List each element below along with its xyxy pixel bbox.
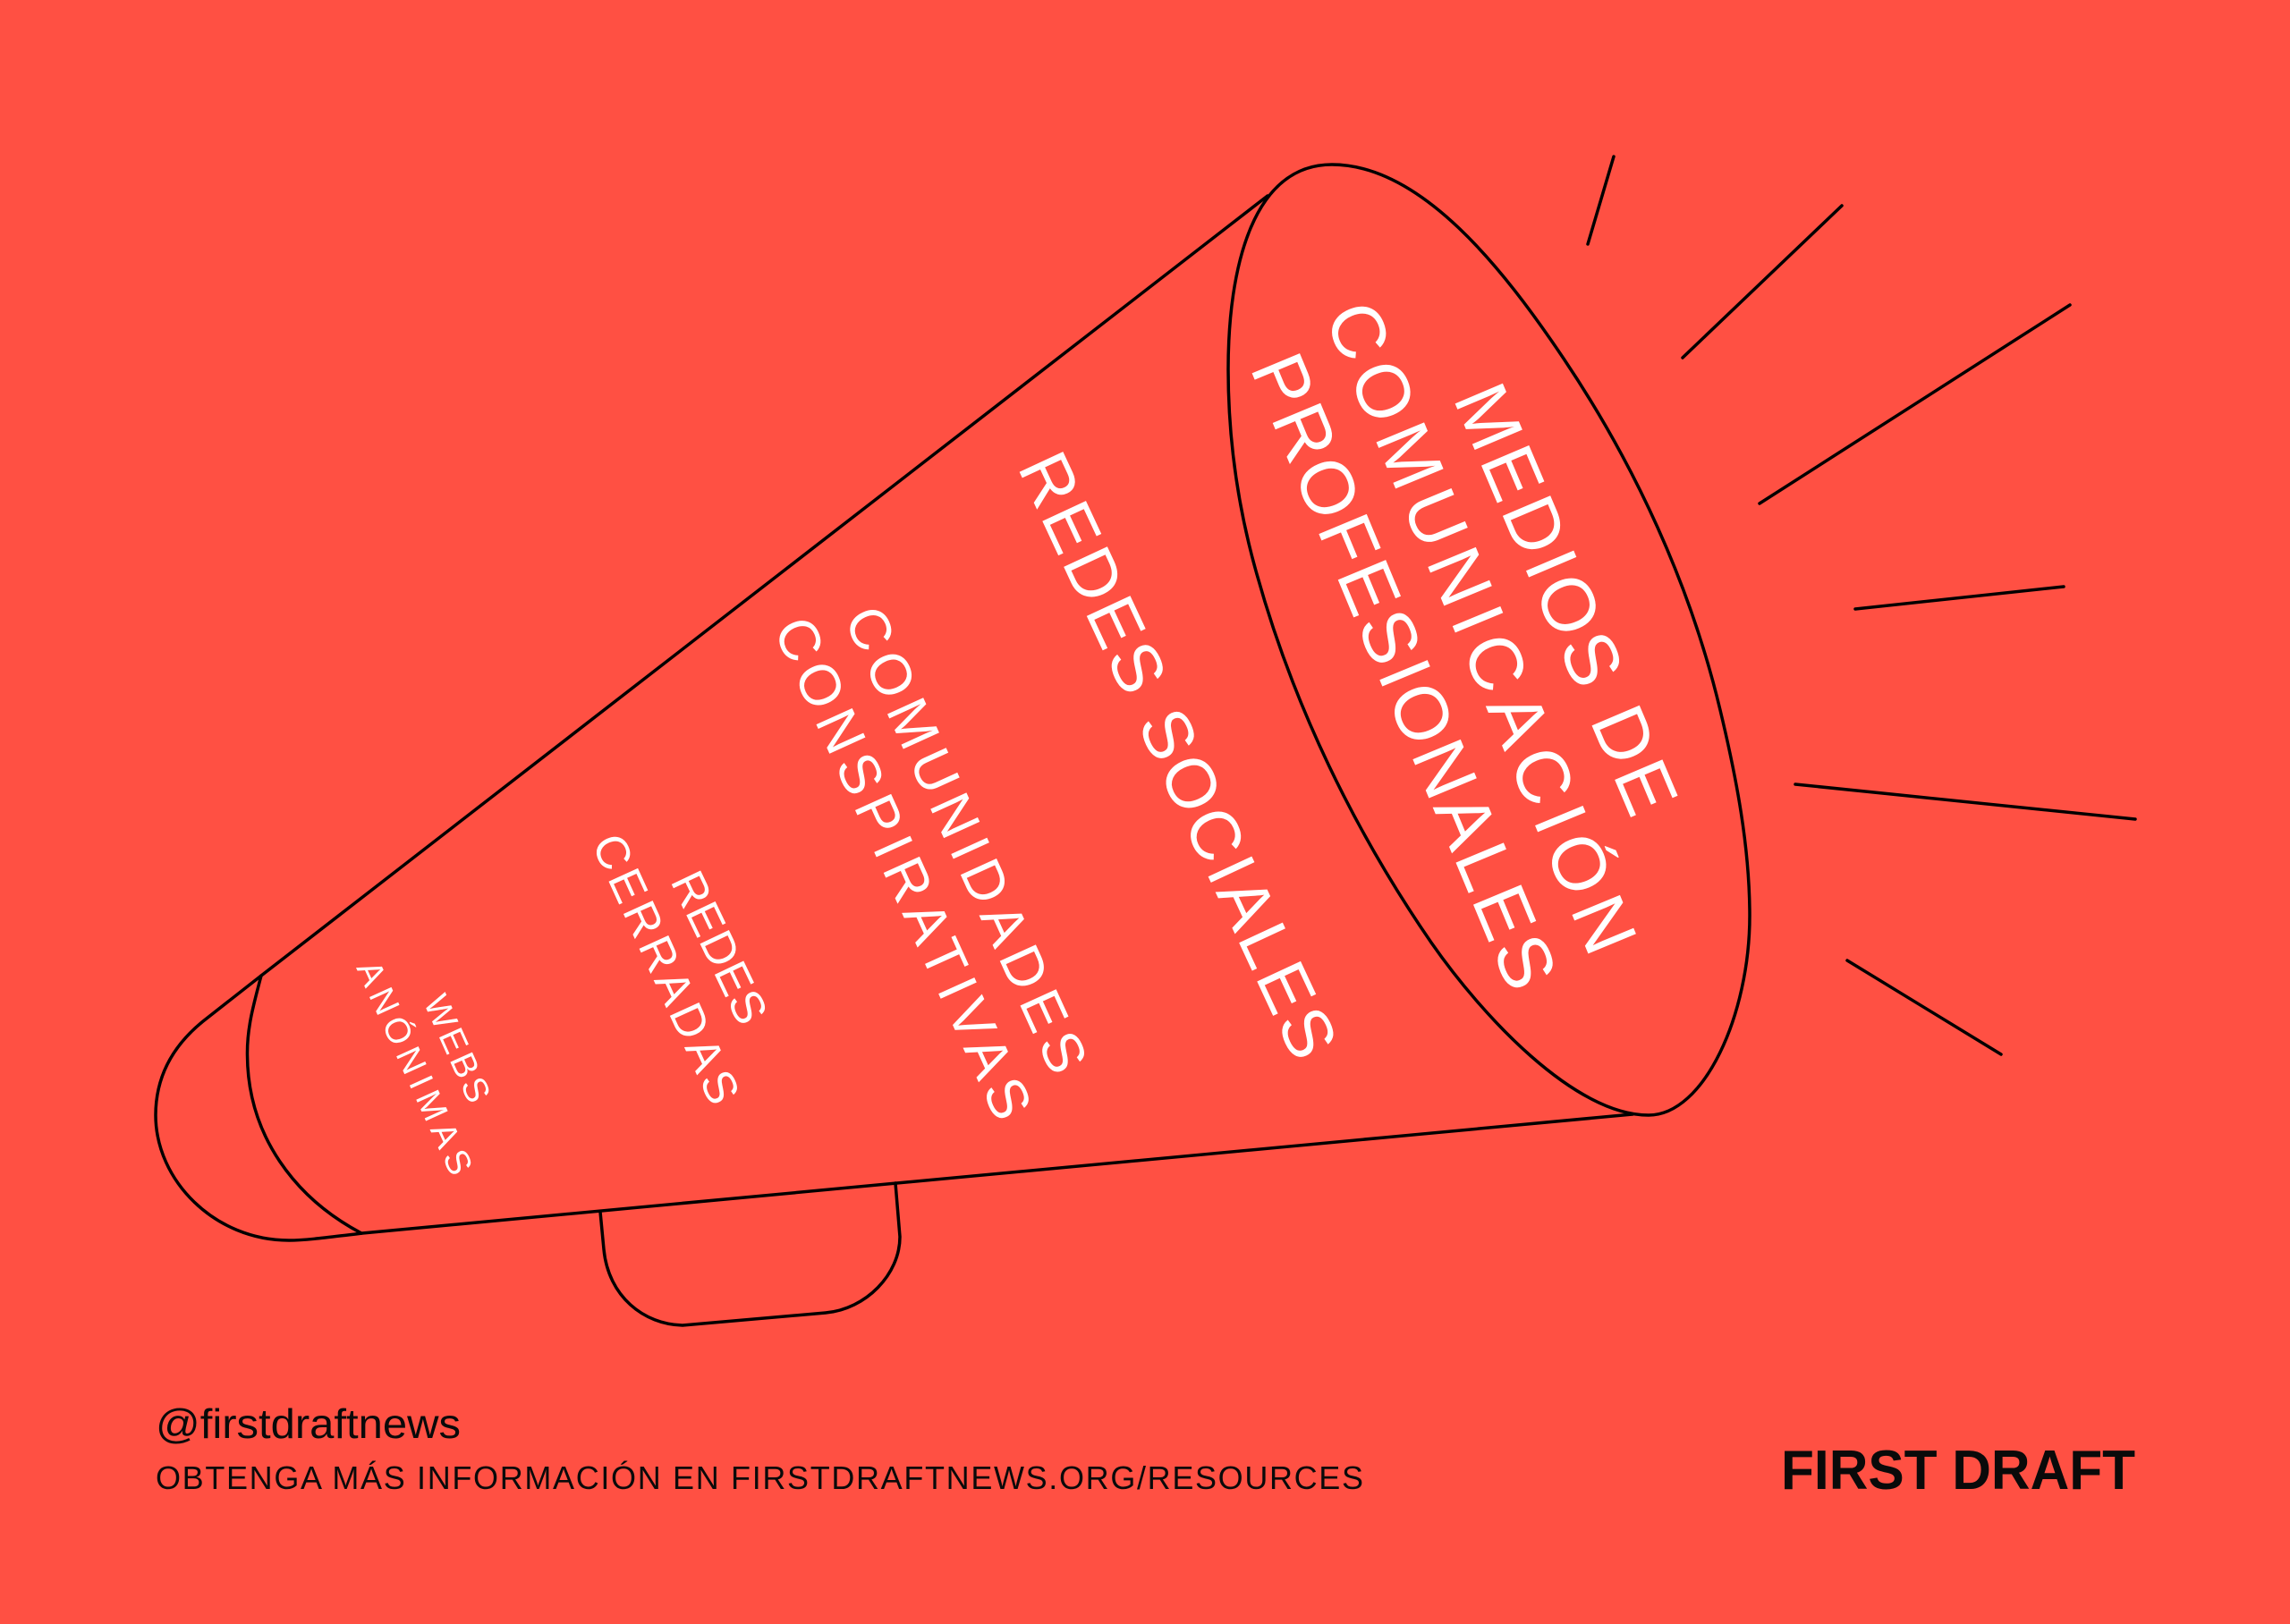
label: comunidades conspirativas: CONSPIRATIVAS bbox=[761, 607, 1045, 1129]
label: medios de comunicación profesionales: COMUNICACIÓN bbox=[1309, 290, 1653, 966]
label: medios de comunicación profesionales: MEDIOS DE bbox=[1438, 371, 1694, 826]
label: redes cerradas: REDES bbox=[660, 863, 777, 1032]
megaphone body outline bbox=[156, 196, 1633, 1240]
label: webs anónimas: WEBS bbox=[416, 989, 497, 1109]
label: redes cerradas: CERRADAS bbox=[581, 826, 750, 1112]
megaphone mouth ellipse bbox=[1228, 165, 1750, 1115]
label: redes sociales: REDES SOCIALES bbox=[1004, 440, 1353, 1070]
social handle: @firstdraftnews bbox=[156, 1400, 461, 1447]
label: medios de comunicación profesionales: PROFESIONALES bbox=[1234, 342, 1573, 1002]
megaphone handle bbox=[600, 1183, 900, 1325]
megaphone back end curve bbox=[247, 976, 361, 1233]
megaphone illustration bbox=[156, 165, 1750, 1325]
logo: first draft: FIRST DRAFT bbox=[1781, 1440, 2135, 1501]
label: comunidades conspirativas: COMUNIDADES bbox=[832, 596, 1100, 1083]
label: webs anónimas: ANÓNIMAS bbox=[349, 955, 479, 1181]
sound rays bbox=[1588, 156, 2135, 1054]
more information line: OBTENGA MÁS INFORMACIÓN EN FIRSTDRAFTNEWS.ORG/RESOURCES bbox=[156, 1459, 1363, 1496]
